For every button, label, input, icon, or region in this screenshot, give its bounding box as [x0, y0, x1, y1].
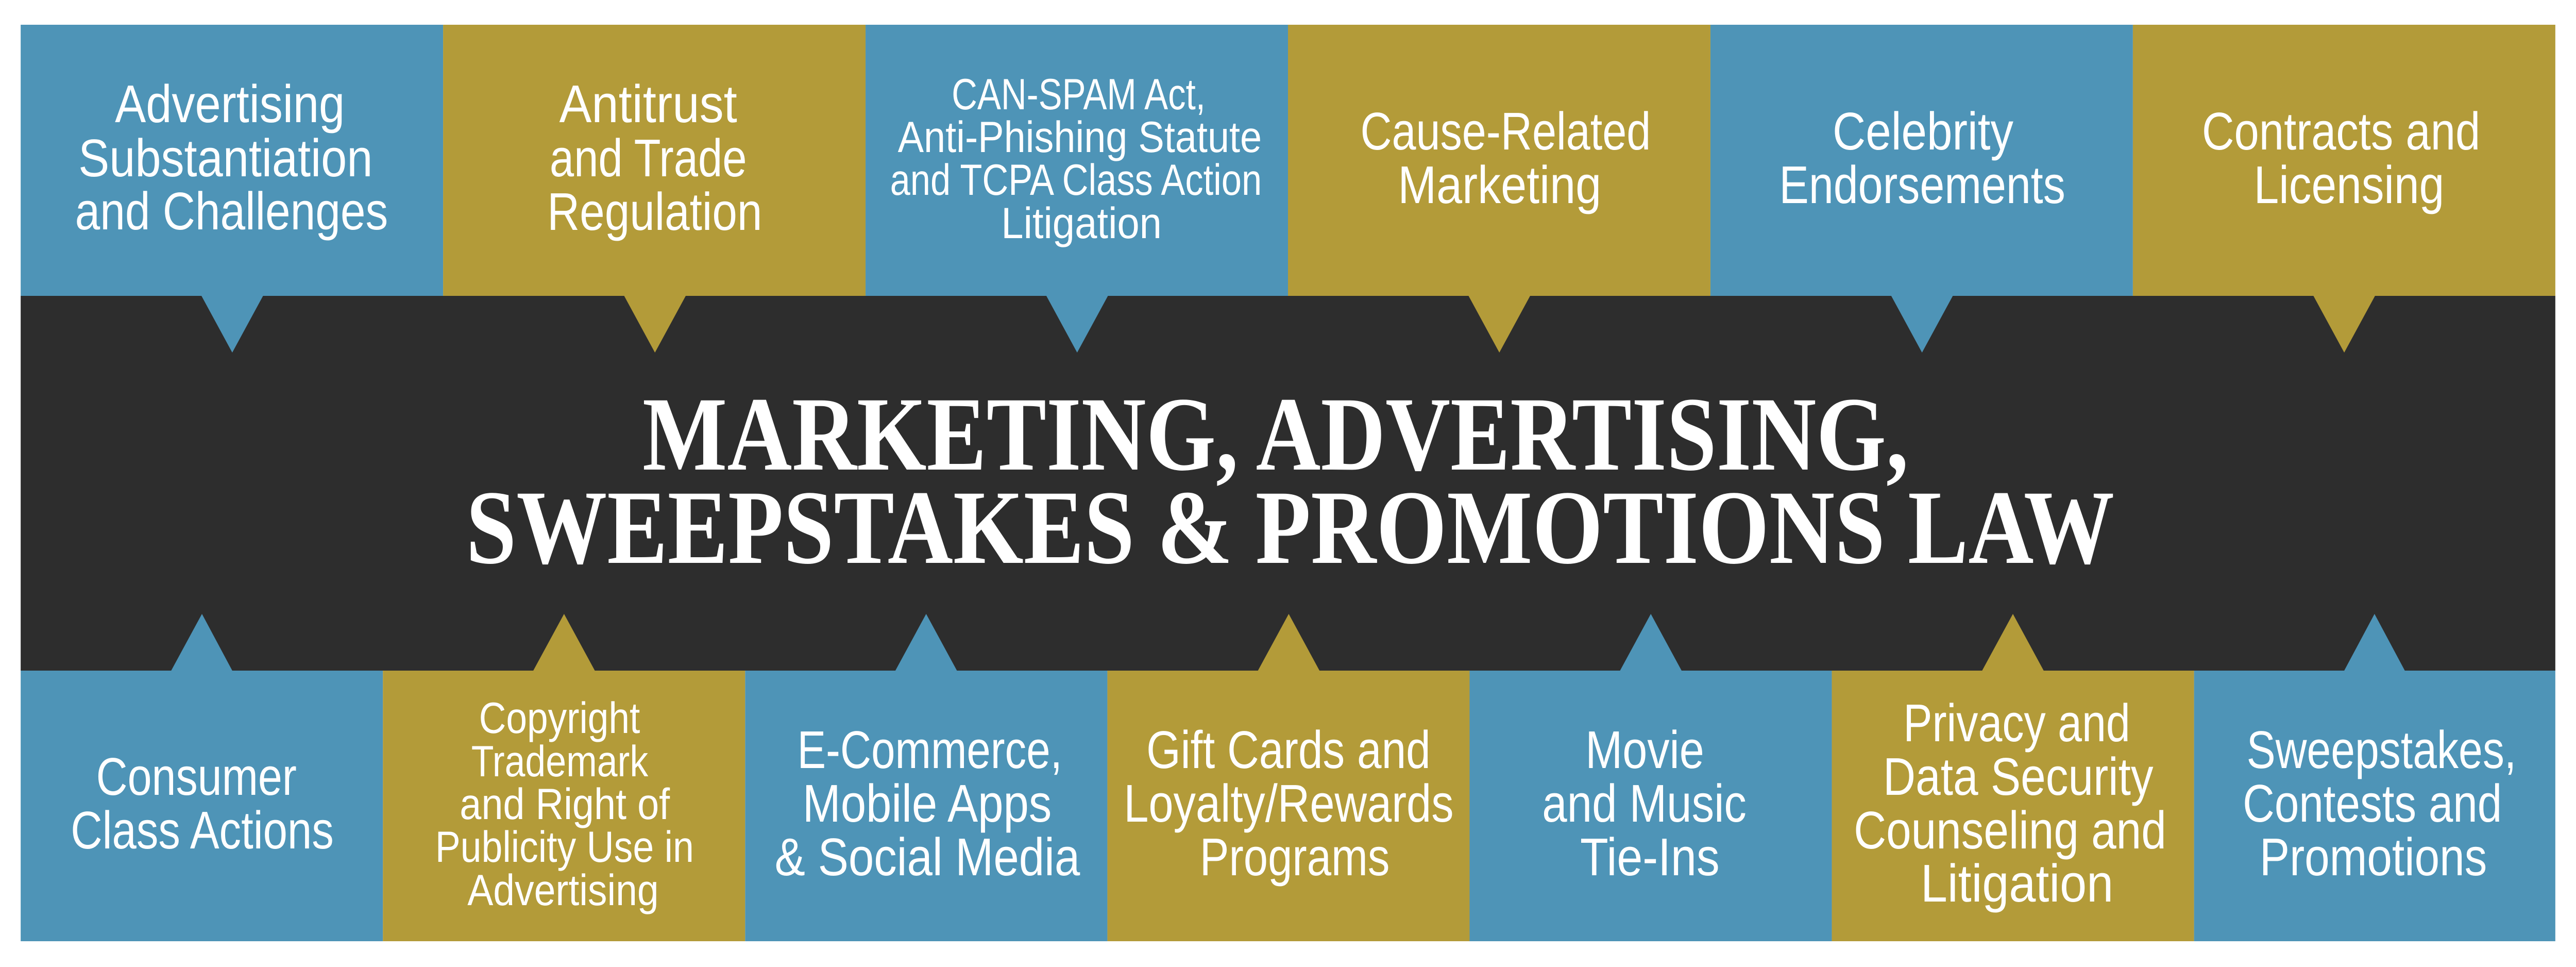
- panel: CAN-SPAM Act, Anti-Phishing Statute and TCPA Class Action Litigation: [866, 25, 1288, 353]
- panel: CAN-SPAM Act, Anti-Phishing Statute and TCPA Class Action Litigation: Anti-Phishing Statute: [898, 113, 1262, 162]
- panel: Privacy and Data Security Counseling and Litigation: Privacy and: [1903, 693, 2130, 753]
- panel: Privacy and Data Security Counseling and Litigation: Data Security: [1883, 747, 2154, 806]
- panel: Movie and Music Tie-Ins: and Music: [1542, 774, 1747, 833]
- panel: Movie and Music Tie-Ins: Tie-Ins: [1580, 827, 1720, 887]
- panel: Consumer Class Actions: Class Actions: [71, 801, 334, 860]
- panel: CAN-SPAM Act, Anti-Phishing Statute and TCPA Class Action Litigation: Litigation: [1001, 199, 1162, 248]
- title: SWEEPSTAKES & PROMOTIONS LAW: [466, 469, 2114, 586]
- panel: Contracts and Licensing: Contracts and: [2202, 102, 2480, 161]
- panel: Antitrust and Trade Regulation: and Trade: [550, 128, 747, 188]
- panel: Celebrity Endorsements: [1710, 25, 2133, 353]
- panel: Celebrity Endorsements: Celebrity: [1833, 102, 2013, 161]
- panel: Privacy and Data Security Counseling and Litigation: Counseling and: [1854, 801, 2166, 860]
- panel: Copyright Trademark and Right of Publicity Use in Advertising: Publicity Use in: [435, 823, 694, 872]
- panel: Antitrust and Trade Regulation: [443, 25, 866, 353]
- panel: Advertising Substantiation and Challenges: Substantiation: [78, 128, 372, 188]
- panel: E-Commerce, Mobile Apps and Social Media: [745, 614, 1107, 941]
- panel: Movie and Music Tie-Ins: Movie: [1585, 720, 1704, 779]
- panel: Copyright Trademark and Right of Publicity Use in Advertising: and Right of: [460, 780, 670, 829]
- panel: Sweepstakes, Contests and Promotions: Contests and: [2243, 774, 2502, 833]
- panel: Gift Cards and Loyalty/Rewards Programs: Gift Cards and: [1146, 720, 1431, 779]
- panel: Cause-Related Marketing: [1288, 25, 1710, 353]
- panel: Sweepstakes, Contests and Promotions: Promotions: [2260, 827, 2487, 887]
- panel: Celebrity Endorsements: Endorsements: [1779, 155, 2065, 214]
- panel: CAN-SPAM Act, Anti-Phishing Statute and TCPA Class Action Litigation: and TCPA Class Action: [890, 156, 1262, 205]
- panel: Copyright Trademark and Right of Publicity Use in Advertising: [383, 614, 745, 941]
- panel: Advertising Substantiation and Challenges: [21, 25, 443, 353]
- panel: Antitrust and Trade Regulation: Antitrust: [559, 74, 737, 134]
- panel: E-Commerce, Mobile Apps and Social Media: Mobile Apps: [803, 774, 1052, 833]
- panel: Copyright Trademark and Right of Publicity Use in Advertising: Advertising: [467, 866, 659, 915]
- panel: E-Commerce, Mobile Apps and Social Media: & Social Media: [775, 827, 1080, 887]
- panel: CAN-SPAM Act, Anti-Phishing Statute and TCPA Class Action Litigation: CAN-SPAM Act,: [952, 70, 1206, 119]
- panel: Gift Cards and Loyalty/Rewards Programs: Programs: [1200, 827, 1389, 887]
- panel: Cause-Related Marketing: Marketing: [1398, 155, 1601, 214]
- panel: Movie and Music Tie-Ins: [1469, 614, 1832, 941]
- panel: Sweepstakes, Contests and Promotions: Sweepstakes,: [2247, 720, 2516, 779]
- panel: Advertising Substantiation and Challenges: Advertising: [115, 74, 345, 134]
- panel: Privacy and Data Security Counseling and Litigation: Litigation: [1921, 854, 2113, 913]
- title: [466, 376, 2114, 586]
- title: MARKETING, ADVERTISING,: [642, 376, 1908, 493]
- panel: Advertising Substantiation and Challenges: and Challenges: [75, 181, 388, 241]
- central dark band: [21, 296, 2555, 671]
- panel: E-Commerce, Mobile Apps and Social Media: E-Commerce,: [798, 720, 1062, 779]
- panel: Copyright Trademark and Right of Publicity Use in Advertising: Trademark: [471, 737, 649, 786]
- panel: Sweepstakes, Contests and Promotions: [2194, 614, 2555, 941]
- panel: Consumer Class Actions: [21, 614, 383, 941]
- panel: Consumer Class Actions: Consumer: [96, 747, 297, 806]
- panel: Gift Cards and Loyalty/Rewards Programs: [1107, 614, 1470, 941]
- panel: Privacy and Data Security Counseling and Litigation: [1832, 614, 2194, 941]
- panel: Contracts and Licensing: Licensing: [2254, 155, 2444, 214]
- panel: Copyright Trademark and Right of Publicity Use in Advertising: Copyright: [479, 694, 640, 743]
- panel: Gift Cards and Loyalty/Rewards Programs: Loyalty/Rewards: [1124, 774, 1454, 833]
- panel: Cause-Related Marketing: Cause-Related: [1360, 102, 1651, 161]
- panel: Contracts and Licensing: [2133, 25, 2555, 353]
- panel: Antitrust and Trade Regulation: Regulation: [547, 182, 762, 241]
